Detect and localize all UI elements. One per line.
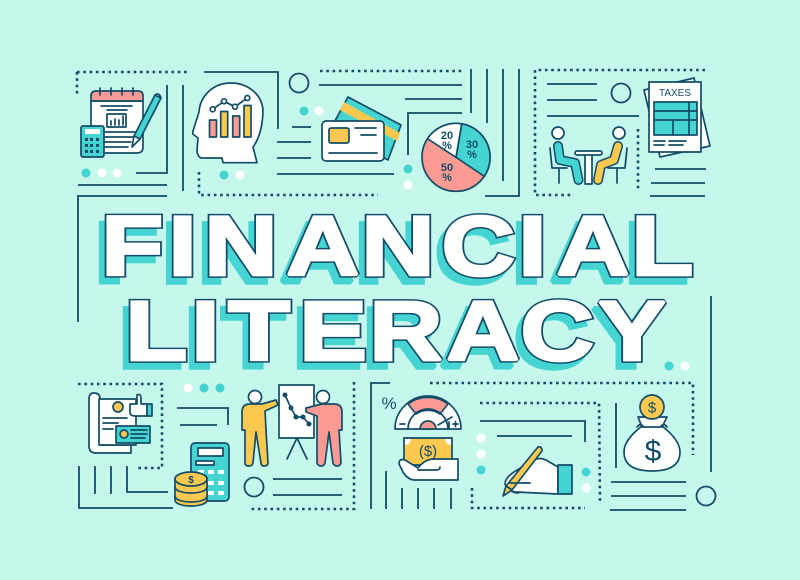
icon: calendar with calculator and pencil [81,88,161,157]
heading: FINANCIAL LITERACY: FINANCIAL [101,199,693,293]
icon: percent gauge and cash in hand [381,394,461,480]
pie chart: % [467,149,477,161]
heading: FINANCIAL LITERACY: LITERACY [119,291,660,385]
pie chart: 30 [466,139,478,151]
heading: FINANCIAL LITERACY: LITERACY [125,284,666,378]
heading: FINANCIAL LITERACY: FINANCIAL [101,199,693,293]
pie chart: % [442,172,452,184]
icon: taxes document [644,78,710,157]
pie chart: % [442,140,452,152]
pie chart: 20 [441,130,453,142]
icon: head with bar chart [193,83,263,163]
icon: taxes document: TAXES [659,88,691,99]
heading: FINANCIAL LITERACY [95,199,693,385]
icon: money bag with coin [624,395,680,471]
icon: credit cards [322,97,401,161]
icon: money bag with coin: $ [648,400,657,416]
icon: percent gauge and cash in hand: ($) [419,443,437,460]
icon: percent gauge and cash in hand: % [381,394,397,413]
pie chart [422,123,490,191]
icon: calculator with coins: $ [188,475,194,486]
heading: FINANCIAL LITERACY: FINANCIAL [95,206,687,300]
icon: scroll with thumbs up and card [89,393,152,453]
icon: two people meeting at table [550,127,627,184]
heading: FINANCIAL LITERACY: LITERACY [125,284,666,378]
icon: calculator with coins [175,443,229,506]
icon: presenter and colleague at chart board [242,385,342,466]
icon: hand writing with pen [503,447,572,496]
pie chart: 50 [441,162,453,174]
icon: money bag with coin: $ [645,435,662,468]
